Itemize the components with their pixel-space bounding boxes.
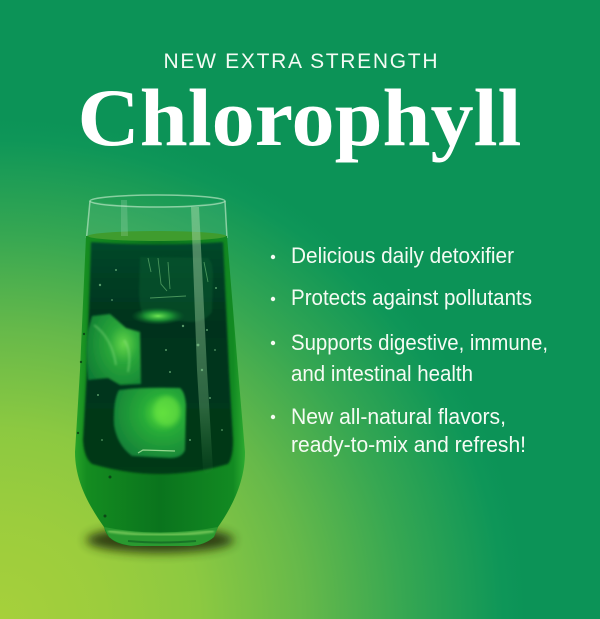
bullet 3: Supports digestive, immune,	[291, 330, 548, 355]
ice cube upper	[131, 257, 213, 325]
liquid body	[75, 232, 245, 546]
dark inner drink	[83, 242, 233, 474]
rim	[86, 195, 227, 238]
eyebrow heading: NEW EXTRA STRENGTH	[164, 50, 438, 73]
bullet 2: Protects against pollutants	[291, 285, 532, 310]
bullet 3: and intestinal health	[291, 361, 473, 386]
dark droplets on glass edge	[77, 333, 112, 518]
glass of green drink	[75, 195, 245, 553]
vertical glass highlight	[191, 207, 213, 474]
benefits list	[271, 243, 548, 457]
glass base	[104, 527, 218, 546]
condensation droplets	[97, 269, 223, 441]
empty upper glass	[87, 201, 227, 236]
bullet 4: New all-natural flavors,	[291, 404, 506, 429]
title: Chlorophyll	[78, 72, 522, 163]
bullet 4	[271, 404, 526, 457]
bullet 4: ready-to-mix and refresh!	[291, 432, 526, 457]
shadow under glass	[86, 527, 234, 553]
bullet 1: Delicious daily detoxifier	[291, 243, 514, 268]
liquid surface	[88, 231, 226, 241]
ice cube left	[86, 314, 141, 385]
ice cube lower	[114, 388, 186, 458]
bullet 3	[271, 330, 548, 386]
